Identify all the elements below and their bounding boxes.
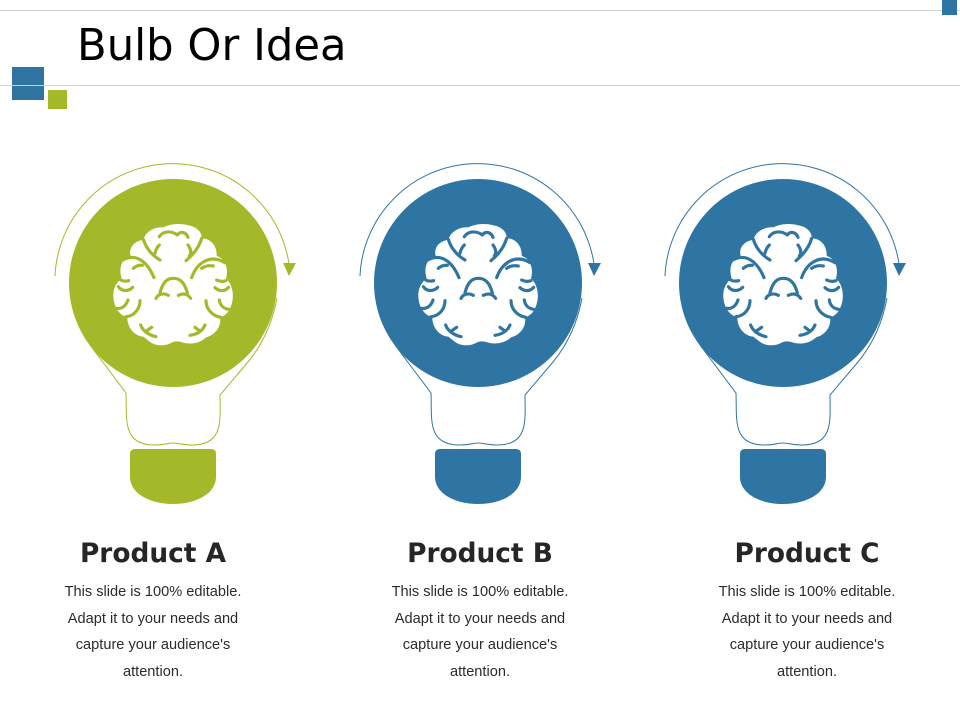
text block: Product A: This slide is 100% editable.: [65, 584, 241, 600]
bulb base A: [130, 449, 216, 504]
text block: Product C: Product C: [734, 538, 879, 569]
text block: Product B: Product B: [407, 538, 553, 569]
arrowhead B: [588, 263, 601, 276]
text block: Product C: Adapt it to your needs and: [722, 610, 892, 626]
bulb head circle A: [69, 179, 277, 387]
text block: Product A: [64, 538, 241, 680]
brain icon B: [418, 224, 538, 345]
arrowhead C: [893, 263, 906, 276]
bulb C: blue: [665, 164, 906, 504]
text block: Product B: capture your audience's: [403, 637, 557, 653]
bulb outline C: [700, 298, 887, 445]
text block: Product C: [718, 538, 895, 680]
bulb B: blue: [360, 164, 601, 504]
text block: Product A: Adapt it to your needs and: [68, 610, 238, 626]
title: Bulb Or Idea: [77, 21, 346, 71]
brain icon C: [723, 224, 843, 345]
text block: Product C: This slide is 100% editable.: [719, 584, 895, 600]
text block: Product A: attention.: [123, 664, 183, 680]
bulb base C: [740, 449, 826, 504]
circular arrow A: [55, 164, 289, 276]
bulb head circle C: [679, 179, 887, 387]
blue decorative square: [12, 67, 44, 100]
circular arrow C: [665, 164, 899, 276]
bulb head circle B: [374, 179, 582, 387]
text block: Product A: Product A: [80, 538, 226, 569]
arrowhead A: [283, 263, 296, 276]
text block: Product C: attention.: [777, 664, 837, 680]
text block: Product B: Adapt it to your needs and: [395, 610, 565, 626]
text block: Product B: This slide is 100% editable.: [392, 584, 568, 600]
green decorative square: [48, 90, 67, 109]
brain icon A: [113, 224, 233, 345]
circular arrow B: [360, 164, 594, 276]
bulb outline B: [395, 298, 582, 445]
text block: Product B: [392, 538, 568, 680]
bulb A: green: [55, 164, 296, 504]
text block: Product C: capture your audience's: [730, 637, 884, 653]
text block: Product A: capture your audience's: [76, 637, 230, 653]
bulb base B: [435, 449, 521, 504]
bulb outline A: [90, 298, 277, 445]
corner square top right: [942, 0, 957, 15]
text block: Product B: attention.: [450, 664, 510, 680]
